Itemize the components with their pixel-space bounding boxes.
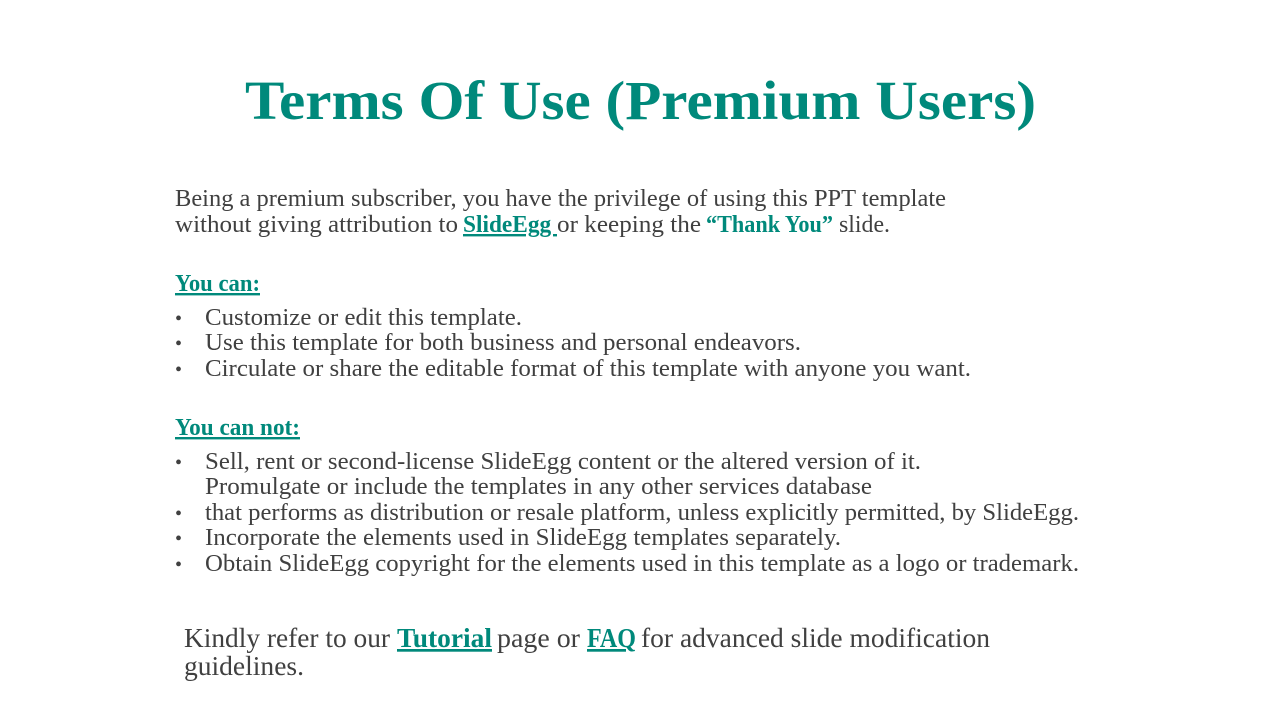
heading: you can: You can: <box>175 271 260 297</box>
closing note: for advanced slide modification <box>641 623 990 653</box>
closing note: FAQ <box>587 623 636 653</box>
list: prohibited uses <box>175 449 1079 577</box>
intro paragraph: without giving attribution to <box>175 212 458 238</box>
list: prohibited uses: Incorporate the elements used in SlideEgg templates separately. <box>205 525 841 551</box>
list: prohibited uses: Sell, rent or second-license SlideEgg content or the altered version of it. <box>205 449 921 475</box>
closing note: guidelines. <box>184 651 304 681</box>
list: permitted uses: Circulate or share the editable format of this template with anyone you want. <box>205 356 971 382</box>
list: permitted uses <box>175 305 971 382</box>
list: permitted uses: • <box>175 308 182 330</box>
intro paragraph: “Thank You” <box>706 212 833 238</box>
list: prohibited uses: that performs as distribution or resale platform, unless explicitly permitted, by SlideEgg. <box>205 500 1079 526</box>
list: prohibited uses: • <box>175 528 182 550</box>
intro paragraph: SlideEgg <box>463 212 557 238</box>
list: prohibited uses: • <box>175 554 182 576</box>
list: permitted uses: Use this template for both business and personal endeavors. <box>205 330 801 356</box>
heading: you can not: You can not: <box>175 415 300 441</box>
list: permitted uses: Customize or edit this template. <box>205 305 522 331</box>
list: permitted uses: • <box>175 359 182 381</box>
intro paragraph: or keeping the <box>557 212 701 238</box>
intro paragraph: Being a premium subscriber, you have the privilege of using this PPT template <box>175 186 946 212</box>
intro paragraph <box>175 186 946 238</box>
intro paragraph: slide. <box>839 212 890 238</box>
closing note: Kindly refer to our <box>184 623 390 653</box>
closing note <box>184 623 990 681</box>
closing note: page or <box>497 623 580 653</box>
list: permitted uses: • <box>175 333 182 355</box>
list: prohibited uses: Obtain SlideEgg copyright for the elements used in this template as a logo or trademark. <box>205 551 1079 577</box>
list: prohibited uses: • <box>175 452 182 474</box>
closing note: Tutorial <box>397 623 492 653</box>
title: Terms Of Use (Premium Users) <box>245 70 1036 131</box>
list: prohibited uses: Promulgate or include the templates in any other services database <box>205 474 872 500</box>
list: prohibited uses: • <box>175 503 182 525</box>
